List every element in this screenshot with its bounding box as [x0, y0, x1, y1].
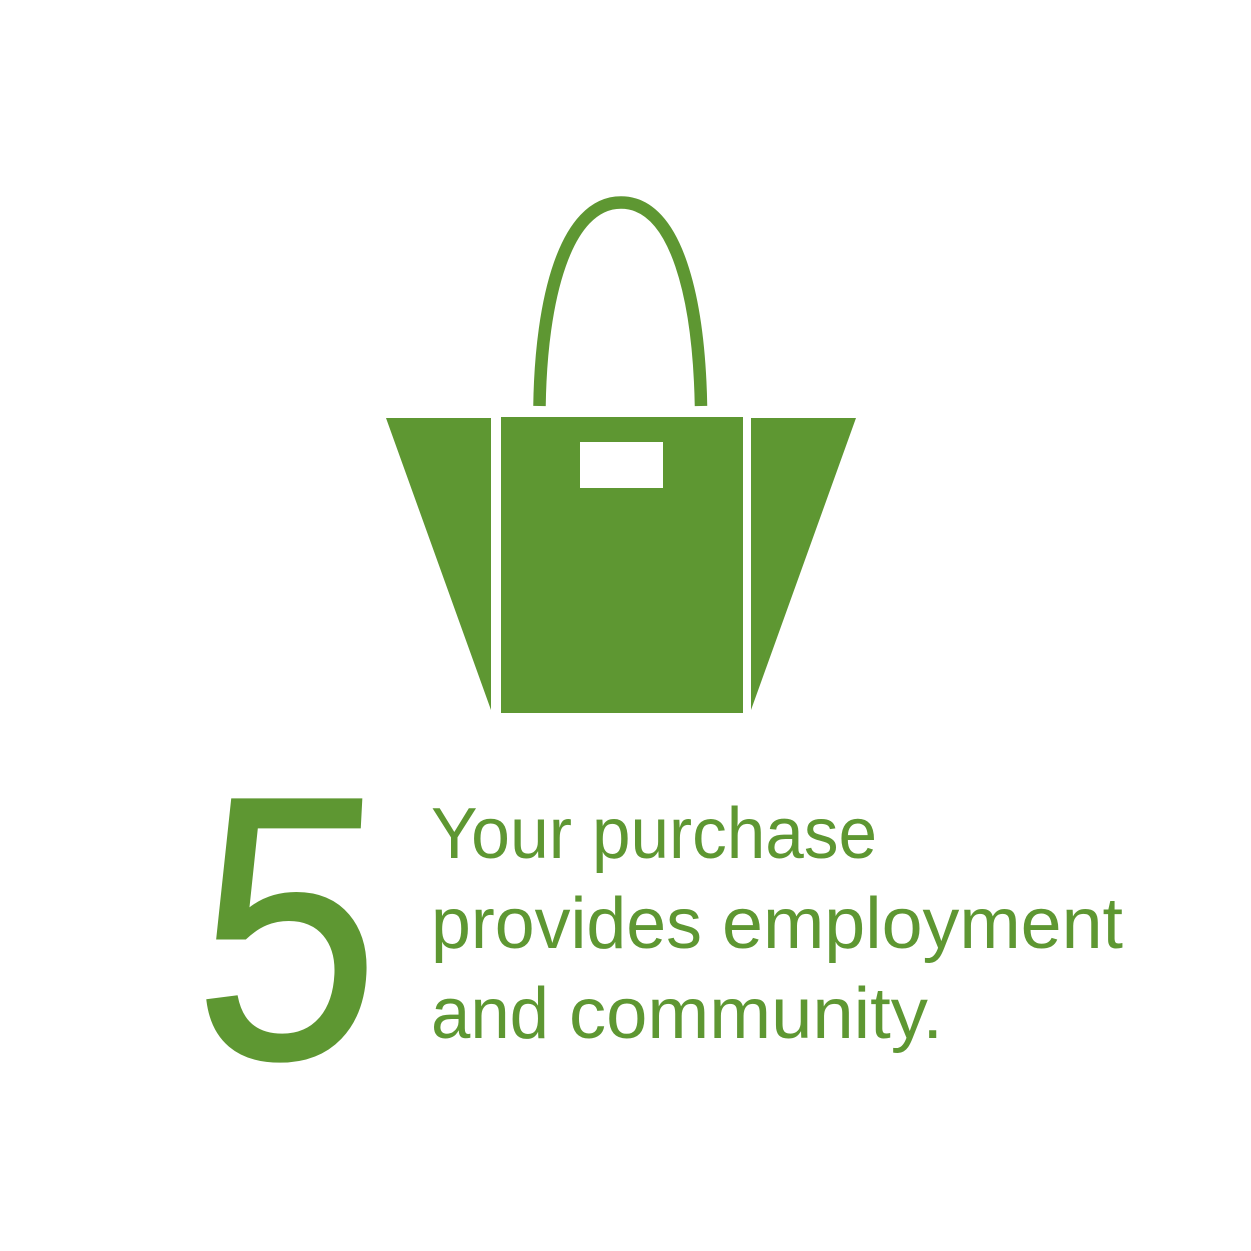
left bag panel: [386, 418, 491, 710]
caption text: provides: [431, 884, 702, 964]
caption text: employment: [722, 884, 1123, 964]
right bag panel: [751, 418, 856, 710]
caption text: community.: [569, 974, 943, 1054]
caption text: and: [431, 974, 549, 1054]
caption text: Your: [431, 794, 572, 874]
caption text: purchase: [592, 794, 877, 874]
bag handle: [540, 202, 701, 406]
step number 5: 5: [187, 717, 393, 1138]
caption text: [431, 794, 1123, 1054]
icon: green tote bag: [386, 202, 856, 713]
bag front: [501, 417, 743, 713]
